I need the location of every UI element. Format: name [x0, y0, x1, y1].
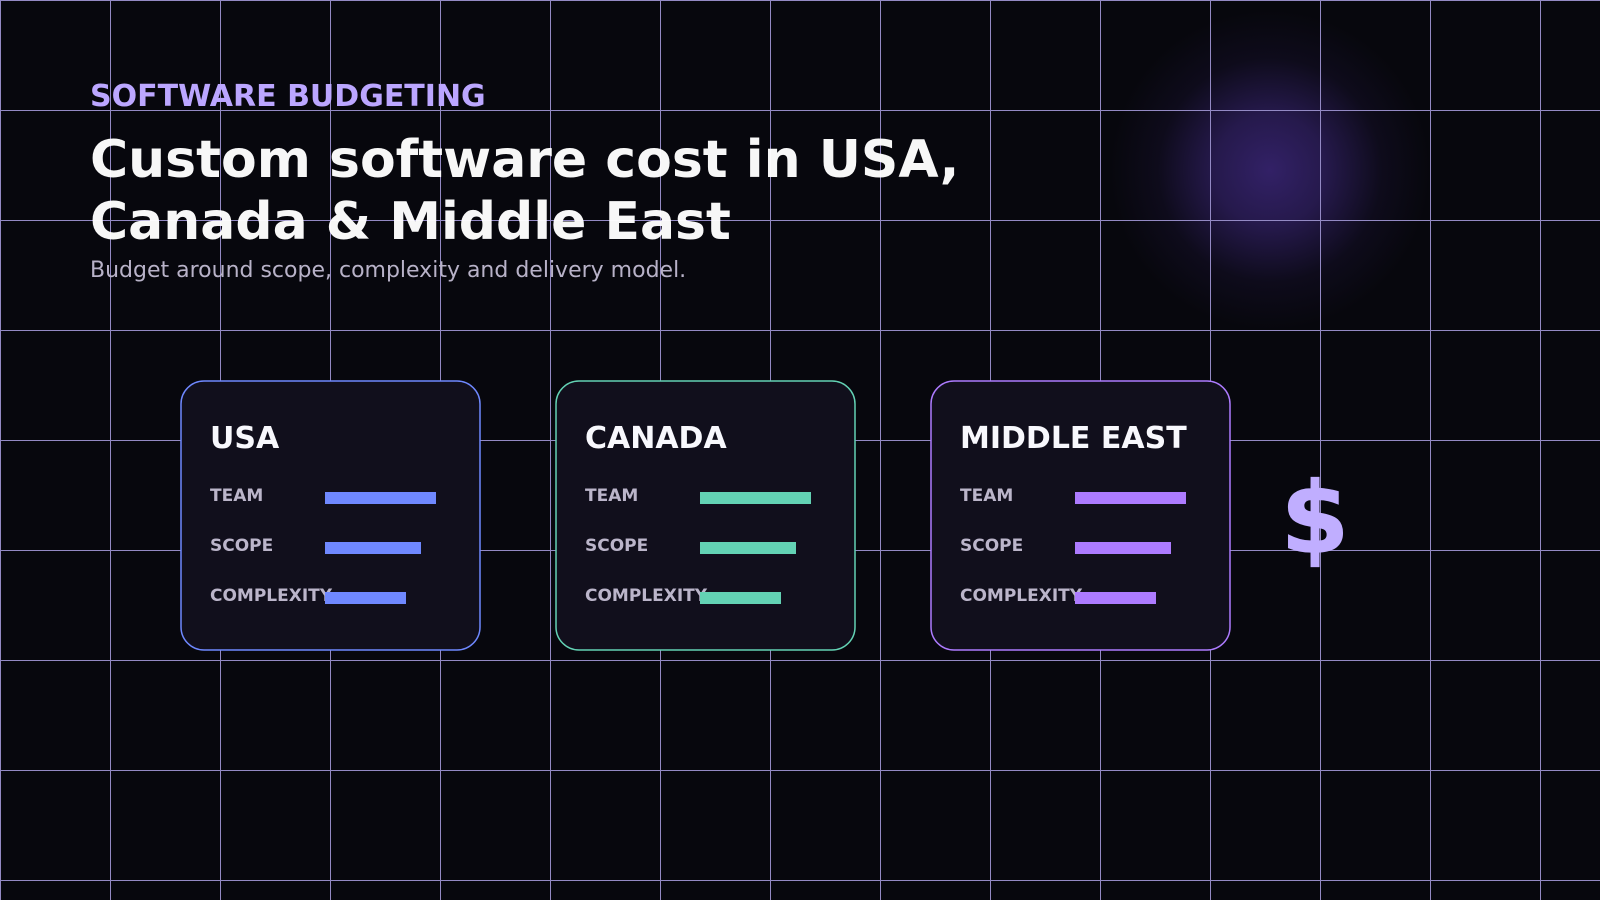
panel: Middle East [931, 381, 1230, 650]
row: team: TEAM [960, 486, 1013, 506]
heading: USA: USA [210, 421, 280, 456]
row: scope [960, 536, 1171, 556]
panel: Canada [556, 381, 855, 650]
panel: USA [181, 381, 480, 650]
heading: Middle East: MIDDLE EAST [960, 421, 1187, 456]
row: team [960, 486, 1186, 506]
row: scope [585, 536, 796, 556]
row: team: TEAM [585, 486, 638, 506]
row: scope: SCOPE [210, 536, 273, 556]
row: team [585, 486, 811, 506]
row: team [210, 486, 436, 506]
row: complexity: COMPLEXITY [585, 586, 708, 606]
row: scope [210, 536, 421, 556]
row: complexity: COMPLEXITY [960, 586, 1083, 606]
background glow [1110, 10, 1430, 330]
subtitle: Budget around scope, complexity and delivery model. [90, 258, 686, 283]
row: team: TEAM [210, 486, 263, 506]
icon: dollar sign: $ [1281, 462, 1349, 576]
row: complexity [210, 586, 406, 606]
row: complexity [960, 586, 1156, 606]
row: scope: SCOPE [960, 536, 1023, 556]
row: scope: SCOPE [585, 536, 648, 556]
row: complexity [585, 586, 781, 606]
title: Canada & Middle East [90, 192, 731, 252]
title: Custom software cost in USA, [90, 130, 959, 190]
heading: Canada: CANADA [585, 421, 727, 456]
eyebrow: SOFTWARE BUDGETING [90, 79, 486, 114]
row: complexity: COMPLEXITY [210, 586, 333, 606]
